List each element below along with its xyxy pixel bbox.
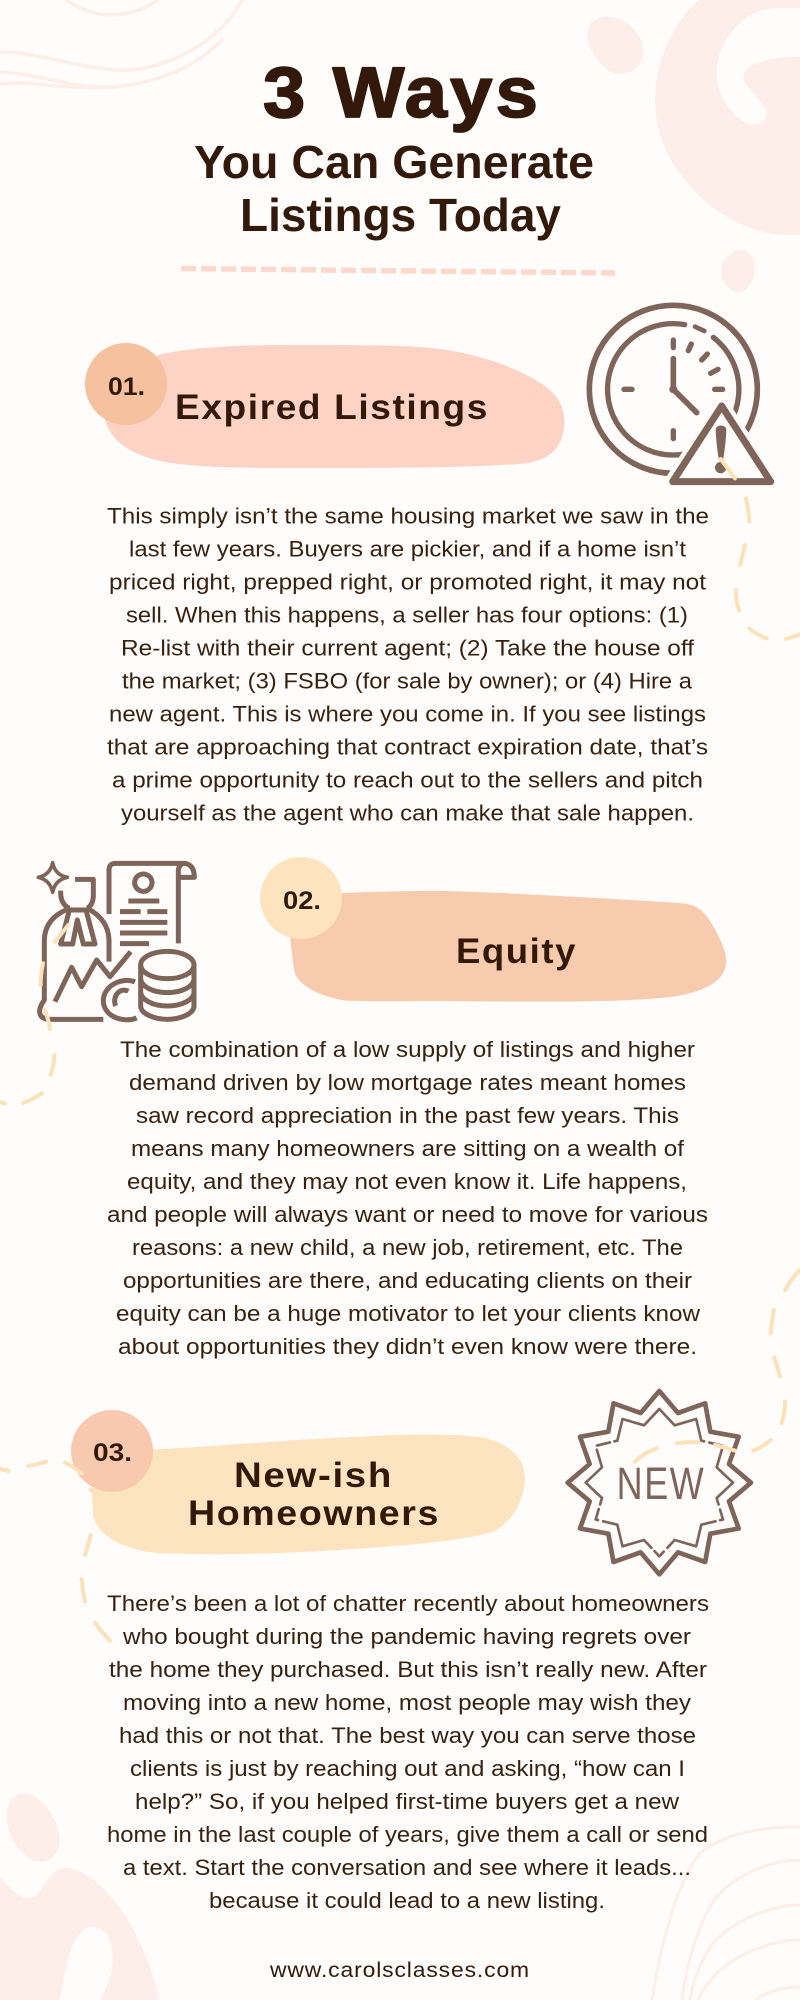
text block: section 2 body: means many homeowners are sitting on a wealth of (131, 1136, 685, 1161)
text block: section 3 body: There’s been a lot of chatter recently about homeowners (107, 1591, 709, 1616)
panel: section 3 heading (71, 1410, 525, 1554)
background: top-left wave lines (0, 0, 242, 88)
text block: section 2 body: saw record appreciation in the past few years. This (136, 1103, 679, 1128)
text block: section 3 body: because it could lead to a new listing. (209, 1888, 605, 1913)
text block: section 1 body: that are approaching that contract expiration date, that’s (107, 734, 708, 760)
background: bottom-left blob (0, 1794, 160, 2000)
decorative path: dashes left of section 2 (0, 925, 68, 1103)
text block: section 3 body: help?” So, if you helped first-time buyers get a new (135, 1789, 679, 1814)
heading blob 3 (92, 1435, 525, 1554)
text block: section 2 body (107, 1037, 708, 1359)
text block: section 3 body (107, 1591, 709, 1913)
heading blob 1 (103, 345, 564, 468)
text block: section 3 body: the home they purchased. But this isn’t really new. After (109, 1657, 707, 1682)
decorative path: dashes right of section 3 (635, 1270, 800, 1462)
text block: section 1 body: a prime opportunity to reach out to the sellers and pitch (112, 768, 703, 792)
text block: section 1 body: priced right, prepped right, or promoted right, it may not (109, 570, 706, 594)
text block: section 2 body: about opportunities they didn’t even know were there. (118, 1334, 697, 1359)
heading blob 2 (290, 891, 726, 1002)
decorative path: dashes right of section 1 (721, 459, 800, 639)
text block: section 2 body: equity can be a huge motivator to let your clients know (116, 1301, 700, 1326)
heading: Expired Listings: Expired Listings (175, 388, 489, 427)
title (194, 54, 594, 241)
number badge 02 (260, 857, 342, 939)
text block: section 3 body: home in the last couple of years, give them a call or send (107, 1822, 708, 1847)
text block: section 1 body: Re-list with their current agent; (2) Take the house off (121, 636, 695, 660)
icon: money bag, document, chart and coins (38, 863, 194, 1020)
number 02: 02. (283, 887, 321, 915)
heading: Equity: Equity (456, 932, 577, 971)
decorative path: dashes left of section 3 (0, 1462, 110, 1641)
text block: section 2 body: demand driven by low mortgage rates meant homes (129, 1070, 686, 1095)
icon: NEW starburst badge (568, 1391, 751, 1574)
text block: section 1 body: new agent. This is where you come in. If you see listings (109, 702, 706, 726)
text block: section 1 body: last few years. Buyers are pickier, and if a home isn’t (129, 536, 686, 562)
text block: section 3 body: who bought during the pandemic having regrets over (122, 1624, 691, 1649)
text block: section 1 body: the market; (3) FSBO (for sale by owner); or (4) Hire a (122, 668, 693, 694)
number badge 01 (85, 343, 167, 425)
panel: section 1 heading (85, 343, 564, 468)
icon: clock with warning triangle (589, 305, 771, 482)
number 03: 03. (93, 1439, 132, 1467)
title line: Listings Today: Listings Today (240, 189, 561, 241)
title line: You Can Generate: You Can Generate (194, 136, 594, 188)
text block: section 1 body: yourself as the agent who can make that sale happen. (121, 800, 694, 826)
number 01: 01. (108, 373, 145, 401)
text block: section 3 body: clients is just by reaching out and asking, “how can I (130, 1756, 685, 1781)
title line: 3 Ways: 3 Ways (263, 54, 541, 133)
heading: New-ish: New-ish (234, 1456, 393, 1495)
text block: section 2 body: equity, and they may not even know it. Life happens, (127, 1169, 687, 1194)
text block: section 1 body (107, 504, 709, 826)
text block: section 2 body: and people will always want or need to move for various (107, 1202, 708, 1227)
text block: section 3 body: a text. Start the conversation and see where it leads... (123, 1855, 691, 1880)
text block: section 3 body: moving into a new home, most people may wish they (123, 1690, 691, 1715)
heading: Homeowners: Homeowners (188, 1494, 440, 1533)
text block: section 1 body: sell. When this happens, a seller has four options: (1) (126, 602, 688, 628)
background: bottom-right wave lines (652, 1827, 800, 2000)
panel: section 2 heading (260, 857, 726, 1002)
text block: section 2 body: The combination of a low supply of listings and higher (120, 1037, 695, 1062)
number badge 03 (71, 1410, 153, 1492)
text block: section 2 body: reasons: a new child, a new job, retirement, etc. The (132, 1235, 683, 1260)
text block: section 1 body: This simply isn’t the same housing market we saw in the (107, 504, 709, 528)
text block: section 2 body: opportunities are there, and educating clients on their (123, 1268, 692, 1293)
icon label: NEW: NEW (617, 1458, 705, 1509)
background: top-right swirl blob (588, 0, 800, 292)
text block: section 3 body: had this or not that. The best way you can serve those (119, 1723, 696, 1748)
footer website: www.carolsclasses.com (269, 1959, 530, 1982)
